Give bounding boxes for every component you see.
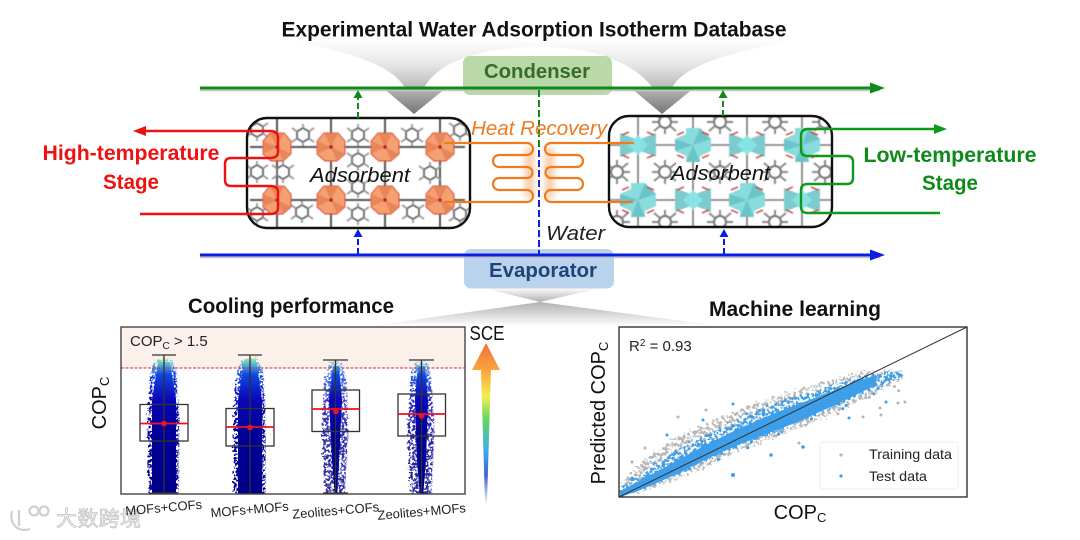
condenser label: [463, 56, 612, 95]
arrow: green cold loop: [801, 129, 940, 213]
condenser label: Condenser: [484, 61, 590, 83]
arrow: red hot loop: [140, 131, 278, 214]
legend: [820, 442, 958, 489]
tick labels: MOFs+COFs: [125, 497, 203, 518]
medians: [140, 409, 446, 427]
axis label: y: C: [97, 377, 112, 386]
label: SCE: SCE: [470, 323, 504, 345]
axis label: y: C: [596, 342, 611, 351]
arrow: right up green: [718, 90, 728, 116]
chart: cooling performance box plot: [89, 327, 467, 523]
frame: [121, 327, 465, 494]
threshold line: [121, 367, 465, 369]
scatter: training points: [619, 371, 906, 497]
axis label: y: COP: [89, 386, 111, 429]
watermark: [11, 506, 141, 531]
boxes: [140, 355, 446, 493]
arrow: left up blue: [354, 229, 362, 254]
arrow: red arrow head: [133, 126, 146, 136]
label: threshold: > 1.5: [170, 333, 208, 350]
band: high COP region: [121, 327, 465, 368]
label: heat recovery: Heat Recovery: [471, 118, 608, 140]
label: R squared: = 0.93: [645, 338, 692, 355]
chart: machine learning parity plot: [588, 327, 967, 525]
heading: cooling performance: Cooling performance: [188, 295, 394, 318]
arrow: central blue dashed: [538, 150, 540, 254]
arrow: evaporator line: [200, 250, 885, 260]
funnel: evaporator lower: [370, 302, 720, 326]
arrow: condenser line: [200, 82, 885, 94]
panel: right adsorbent: [608, 114, 834, 228]
watermark icon: [11, 506, 48, 530]
heat exchanger coil: [445, 143, 633, 202]
funnel: evaporator upper: [483, 288, 600, 302]
axis label: x: C: [817, 510, 826, 525]
arrow: left up green: [354, 90, 362, 118]
label: threshold: COP: [130, 333, 163, 350]
label: low temperature stage: Low-temperature: [864, 144, 1036, 167]
arrow: central green dashed: [538, 90, 540, 150]
tick labels: Zeolites+COFs: [292, 499, 380, 522]
tick labels: [125, 497, 467, 523]
axis label: y: Predicted COP: [588, 351, 610, 484]
evaporator label: Evaporator: [489, 260, 597, 282]
scatter: test core: [620, 375, 878, 497]
title: Experimental Water Adsorption Isotherm Database: [282, 18, 786, 42]
label: R squared: R: [629, 338, 640, 355]
scatter: outliers: [630, 400, 906, 477]
label: threshold: C: [163, 341, 170, 352]
arrow: green arrow head: [934, 124, 947, 134]
scatter: test dots: [632, 373, 904, 488]
label: stage green: Stage: [922, 172, 978, 195]
arrow: right up blue: [720, 229, 728, 254]
colour arrow: SCE: [470, 323, 504, 503]
parity line: [619, 327, 967, 497]
evaporator label: [464, 249, 614, 288]
label: R squared: 2: [640, 338, 646, 349]
scatter: test points: [619, 372, 905, 497]
heading: machine learning: Machine learning: [709, 298, 881, 321]
legend: Training data: [869, 446, 952, 462]
label: water: Water: [546, 223, 606, 245]
scatter: training dots: [628, 372, 900, 492]
means: [161, 409, 424, 430]
frame: [619, 327, 967, 497]
tick labels: MOFs+MOFs: [210, 499, 290, 520]
label: stage red: Stage: [103, 171, 159, 194]
legend: Test data: [869, 468, 927, 484]
label: adsorbent right: Adsorbent: [670, 163, 772, 185]
label: adsorbent left: Adsorbent: [309, 165, 412, 187]
watermark text: 大数跨境: [56, 508, 141, 531]
panel: left adsorbent: [246, 117, 471, 228]
label: high temperature stage: High-temperature: [42, 142, 220, 165]
tick labels: Zeolites+MOFs: [377, 500, 467, 523]
axis label: x: COP: [774, 502, 817, 524]
funnel: database funnels: [285, 40, 795, 114]
